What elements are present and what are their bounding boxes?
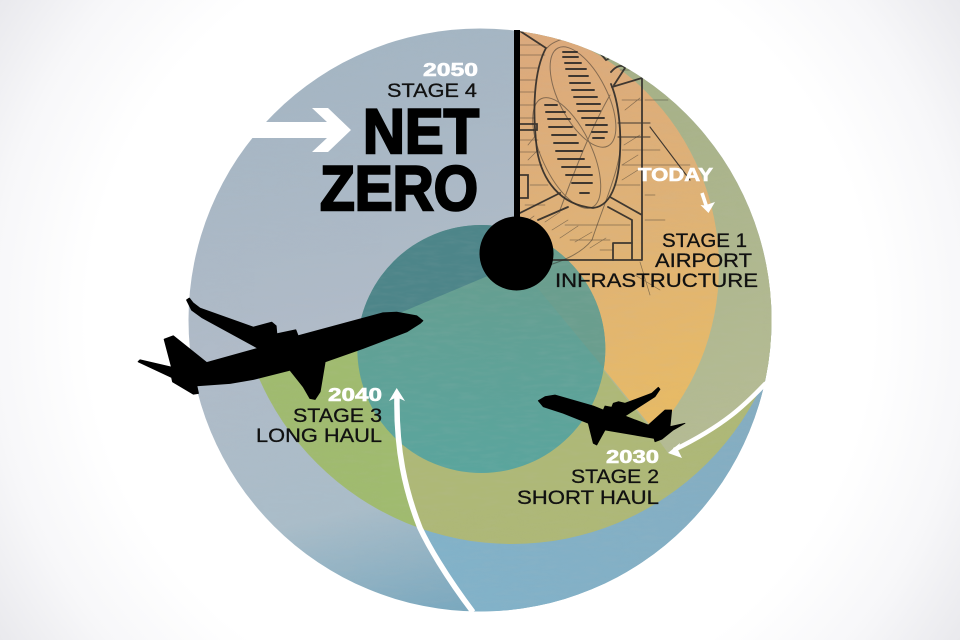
stage 1 label bbox=[555, 230, 758, 292]
hatch lines bbox=[545, 52, 607, 193]
stage 1 orange segment bbox=[520, 31, 719, 424]
center dial bar bbox=[514, 30, 520, 225]
net heading: NET bbox=[363, 97, 479, 167]
stage 3 label: LONG HAUL bbox=[256, 425, 382, 447]
stage 1 label: INFRASTRUCTURE bbox=[555, 270, 758, 292]
stage 2 olive segment bbox=[402, 264, 772, 544]
blue lower ring segment bbox=[424, 300, 772, 612]
upper right olive ring segment bbox=[520, 31, 772, 453]
stage 2 label: 2030 bbox=[606, 447, 659, 467]
terminal outline bbox=[520, 31, 690, 260]
arrow: into net zero bbox=[250, 108, 351, 152]
today label: TODAY bbox=[638, 165, 713, 185]
plane: short haul silhouette bbox=[538, 387, 685, 445]
stage 2 label: SHORT HAUL bbox=[517, 487, 659, 509]
net zero block bbox=[320, 60, 479, 224]
stage 2 label: STAGE 2 bbox=[571, 466, 659, 488]
central teal circle bbox=[357, 225, 606, 473]
stage 3 green segment bbox=[259, 351, 417, 527]
zero heading: ZERO bbox=[320, 154, 478, 224]
stage 4 label: STAGE 4 bbox=[387, 80, 477, 102]
texture overlay bbox=[464, 253, 474, 286]
stage 1 label: AIRPORT bbox=[655, 250, 752, 272]
stage 4 grey outer ring bbox=[180, 20, 780, 620]
stage 3 label bbox=[256, 385, 382, 447]
panel: layered roadmap circle bbox=[188, 28, 772, 612]
year 2050: 2050 bbox=[423, 60, 478, 80]
arrow: today bbox=[700, 193, 715, 213]
center dial dot bbox=[480, 216, 554, 290]
stage 2 label bbox=[517, 447, 659, 509]
arrow: today to 2030 curve bbox=[668, 383, 766, 458]
faint drafting lines bbox=[520, 45, 690, 295]
stage 1 label: STAGE 1 bbox=[662, 230, 747, 252]
hatched ovals bbox=[532, 40, 622, 265]
arrow: 2030 to 2040 curve bbox=[389, 388, 473, 612]
stage 3 label: 2040 bbox=[328, 385, 382, 405]
stage 3 label: STAGE 3 bbox=[293, 405, 382, 427]
airport blueprint sketch bbox=[519, 31, 690, 295]
plane: long haul silhouette bbox=[138, 298, 423, 399]
